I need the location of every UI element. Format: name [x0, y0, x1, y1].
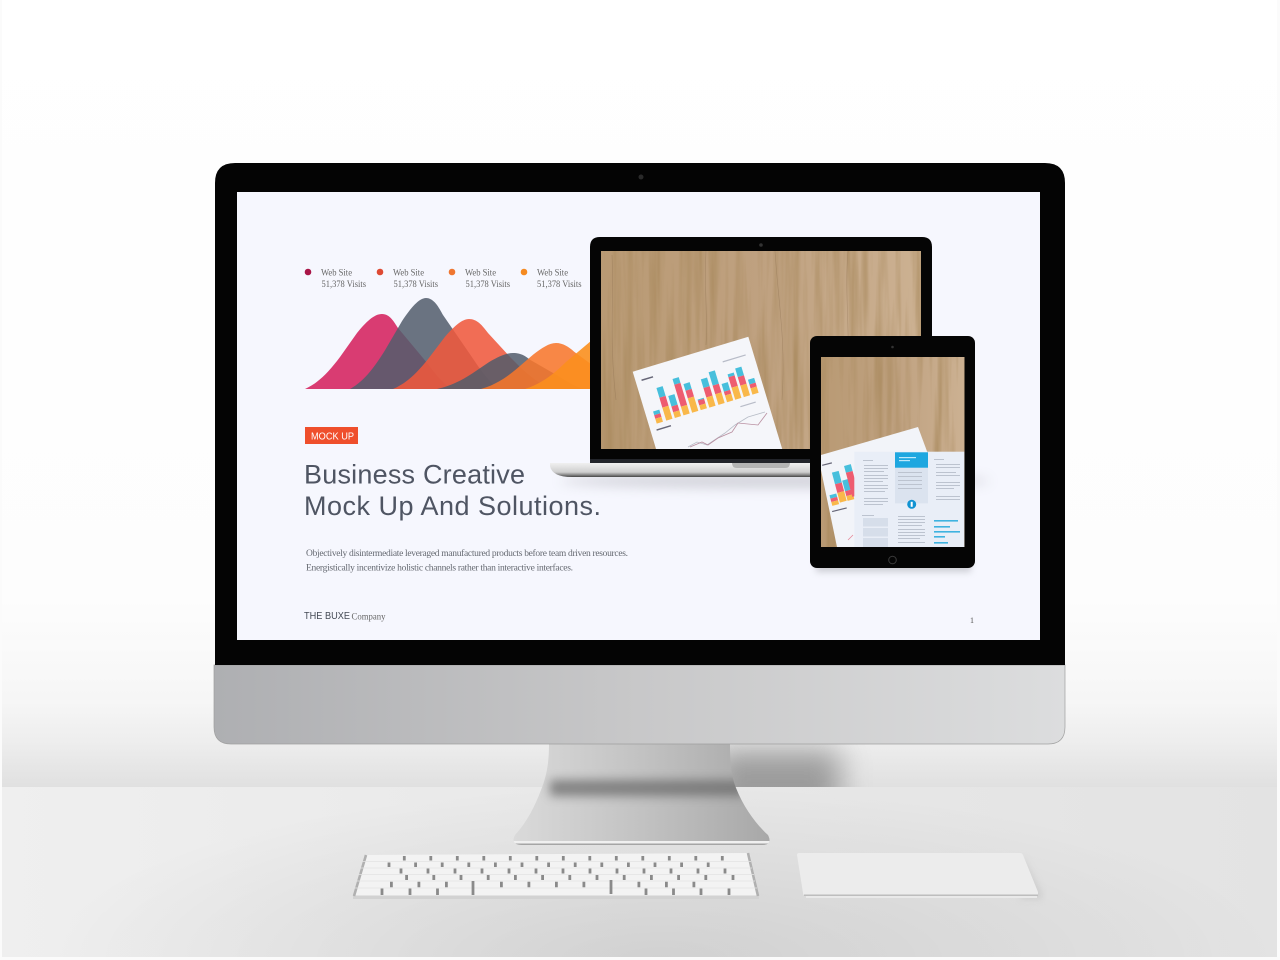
legend item 4: Web Site — [537, 268, 568, 278]
brochure header — [895, 452, 928, 468]
tablet paper — [821, 427, 928, 547]
laptop base — [550, 463, 972, 477]
legend item 2: 51,378 Visits — [394, 280, 438, 290]
legend item 4: 51,378 Visits — [537, 280, 582, 290]
footer company: THE BUXE — [304, 611, 350, 622]
legend item 4 — [521, 268, 582, 290]
paper with bar and line charts — [632, 336, 782, 449]
tag: mock up: MOCK UP — [311, 430, 354, 442]
monitor bezel — [215, 163, 1065, 665]
keyboard body — [353, 853, 759, 899]
legend item 1: 51,378 Visits — [322, 280, 366, 290]
trackpad — [797, 853, 1042, 899]
monitor screen slide — [237, 192, 1040, 640]
title: Mock Up And Solutions. — [304, 491, 601, 521]
desk surface — [0, 787, 1280, 960]
laptop notch — [732, 463, 790, 468]
keyboard key gaps — [382, 856, 733, 895]
keyboard row lines — [355, 862, 757, 888]
tablet — [810, 336, 975, 572]
keyboard — [353, 853, 759, 899]
keyboard side edges — [354, 853, 758, 896]
brochure right column text — [934, 459, 960, 500]
trackpad front edge — [804, 894, 1038, 896]
brochure left column text — [862, 460, 888, 516]
description: Energistically incentivize holistic channels rather than interactive interfaces. — [306, 562, 573, 574]
monitor camera — [638, 174, 644, 180]
legend item 3 — [449, 268, 510, 290]
tablet paper bars — [829, 493, 839, 506]
page number: 1 — [970, 616, 974, 625]
monitor stand — [513, 744, 771, 846]
tablet body — [810, 336, 975, 568]
trackpad shadow — [1020, 855, 1042, 899]
laptop shadow — [560, 474, 990, 488]
description — [306, 548, 628, 574]
legend item 3: 51,378 Visits — [466, 280, 510, 290]
tablet shadow — [816, 561, 971, 572]
brochure info icon — [907, 500, 916, 509]
tag: mock up — [305, 427, 358, 444]
area chart — [305, 298, 590, 389]
tablet screen photo — [821, 357, 964, 547]
description: Objectively disintermediate leveraged manufactured products before team driven resources. — [306, 548, 628, 559]
title: Business Creative — [304, 460, 525, 490]
trackpad surface — [797, 853, 1038, 895]
laptop camera — [759, 243, 763, 247]
footer company — [304, 611, 386, 622]
laptop screen photo — [601, 251, 921, 449]
legend — [305, 268, 582, 290]
legend item 2 — [377, 268, 438, 290]
monitor chin — [214, 665, 1065, 744]
legend item 1 — [305, 268, 366, 290]
tablet home button — [889, 556, 896, 564]
keyboard front edge — [353, 896, 759, 899]
tablet brochure — [854, 452, 964, 547]
brochure center text — [898, 472, 925, 543]
legend item 1: Web Site — [321, 268, 352, 278]
footer company: Company — [352, 612, 386, 622]
legend item 2: Web Site — [393, 268, 424, 278]
laptop — [550, 237, 932, 477]
title — [304, 460, 601, 521]
stand shadow on wall — [730, 744, 857, 787]
laptop lid — [590, 237, 932, 463]
brochure left boxes — [863, 518, 888, 547]
tablet camera — [891, 346, 894, 348]
brochure blue skill bars — [934, 520, 960, 544]
legend item 3: Web Site — [465, 268, 496, 278]
